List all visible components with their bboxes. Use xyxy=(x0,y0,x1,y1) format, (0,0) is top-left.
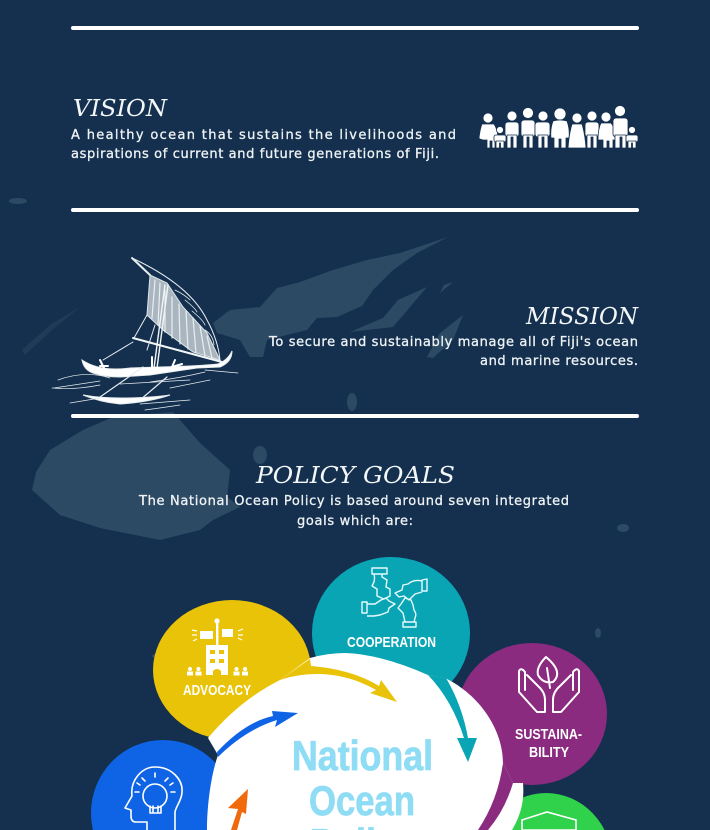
divider middle xyxy=(71,208,639,212)
goals diagram xyxy=(91,557,612,830)
divider top xyxy=(71,26,639,30)
mission heading: MISSION xyxy=(525,304,639,330)
arrow: teal xyxy=(428,675,477,762)
mission text: To secure and sustainably manage all of Fiji's ocean xyxy=(268,335,638,350)
center title: Ocean xyxy=(309,777,415,824)
icon: head with light bulb xyxy=(125,767,182,830)
vision heading: VISION xyxy=(73,96,168,122)
vision text xyxy=(71,128,456,162)
policy goals intro text: The National Ocean Policy is based around seven integrated xyxy=(138,494,569,509)
circle: innovation xyxy=(91,740,216,830)
vision section xyxy=(71,96,456,162)
mission section xyxy=(268,304,639,369)
icon: green shield xyxy=(522,812,576,830)
vision text: aspirations of current and future generations of Fiji. xyxy=(71,147,439,162)
illustration: outrigger sailing canoe xyxy=(52,258,238,410)
center title xyxy=(292,732,433,830)
policy goals intro text: goals which are: xyxy=(297,514,413,529)
arrow: orange xyxy=(228,789,248,830)
arrow: yellow xyxy=(280,659,397,702)
label: sustainability: SUSTAINA- xyxy=(515,726,582,743)
policy goals heading: POLICY GOALS xyxy=(255,463,455,489)
mission text xyxy=(268,335,638,369)
icon: hands holding leaf xyxy=(519,657,579,712)
vision text: A healthy ocean that sustains the livelihoods and xyxy=(71,128,456,143)
center title: National xyxy=(292,732,433,779)
arrow: purple xyxy=(478,763,513,830)
central white circle xyxy=(207,653,523,830)
circle: advocacy xyxy=(153,600,311,740)
policy goals section xyxy=(138,463,569,529)
label: advocacy: ADVOCACY xyxy=(183,682,251,699)
divider lower xyxy=(71,414,639,418)
circle: sustainability xyxy=(457,643,607,785)
icon: group of people xyxy=(479,106,638,148)
circle: green goal xyxy=(512,793,604,830)
icon: building with flag xyxy=(187,618,248,676)
label: sustainability xyxy=(515,729,582,757)
label: sustainability: BILITY xyxy=(529,744,569,761)
policy goals intro text xyxy=(138,494,569,529)
icon: hands with puzzle pieces xyxy=(362,568,427,627)
map of Fiji islands xyxy=(9,198,629,660)
mission text: and marine resources. xyxy=(480,354,638,369)
arrow: blue xyxy=(217,711,298,757)
label: cooperation: COOPERATION xyxy=(347,634,436,651)
circle: cooperation xyxy=(312,557,470,682)
